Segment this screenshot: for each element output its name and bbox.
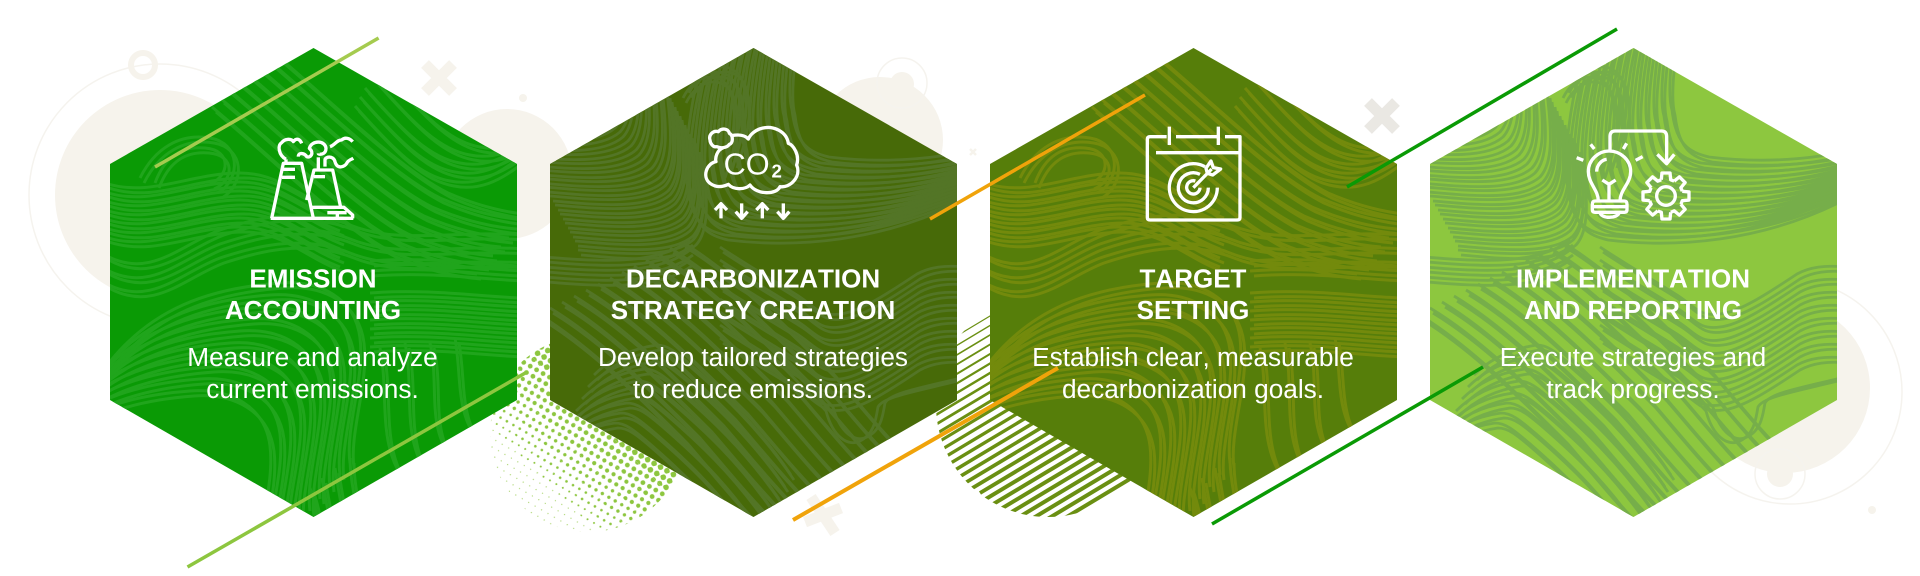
- heading: IMPLEMENTATION: [1516, 264, 1750, 294]
- heading: AND REPORTING: [1524, 295, 1742, 325]
- accent line: green bottom: [1212, 367, 1483, 524]
- hexagon 1 background: [110, 48, 517, 517]
- icon: light bulb and gear: [1577, 131, 1689, 219]
- icon: power plant: [271, 138, 353, 218]
- decoration: left beige circle with ring: [29, 53, 527, 326]
- icon: CO2 cloud: 2: [771, 160, 782, 181]
- hexagon 3 background: [990, 48, 1397, 517]
- description: decarbonization goals.: [1062, 374, 1324, 404]
- heading: DECARBONIZATION: [626, 264, 880, 294]
- decoration: right beige circle with rings: [1678, 280, 1902, 514]
- hexagon 2 background: [550, 48, 957, 517]
- description: Measure and analyze: [187, 342, 438, 372]
- panel: emission accounting: [187, 138, 438, 404]
- heading: TARGET: [1140, 264, 1247, 294]
- icon: CO2 cloud: [706, 127, 798, 218]
- hexagon 4 background: [1430, 48, 1837, 517]
- decoration: beige circle behind hexagon two: [817, 58, 976, 203]
- decoration: bottom cross: [805, 497, 841, 533]
- heading: EMISSION: [249, 264, 377, 294]
- decoration: striped circle: [936, 315, 1130, 517]
- panel: implementation and reporting: [1500, 131, 1766, 404]
- decoration: grey cross: [1368, 102, 1396, 130]
- description: to reduce emissions.: [633, 374, 873, 404]
- decoration: beige circle between hexagons one and two: [442, 109, 572, 239]
- icon: CO2 cloud: CO: [724, 147, 770, 181]
- decoration: halftone dot circle: [490, 344, 676, 532]
- description: track progress.: [1546, 374, 1720, 404]
- icon: calendar target: [1147, 127, 1240, 220]
- panel: target setting: [1032, 127, 1354, 404]
- heading: ACCOUNTING: [225, 295, 401, 325]
- description: Execute strategies and: [1500, 342, 1766, 372]
- heading: SETTING: [1137, 295, 1249, 325]
- description: current emissions.: [206, 374, 419, 404]
- accent line: green top: [1347, 29, 1617, 187]
- accent line: orange top: [930, 95, 1145, 219]
- accent line: light green top: [155, 38, 379, 167]
- heading: STRATEGY CREATION: [611, 295, 895, 325]
- description: Develop tailored strategies: [598, 342, 908, 372]
- panel: decarbonization strategy creation: [598, 127, 908, 404]
- accent line: orange bottom: [793, 368, 1058, 520]
- accent line: light green bottom: [188, 372, 527, 567]
- description: Establish clear, measurable: [1032, 342, 1354, 372]
